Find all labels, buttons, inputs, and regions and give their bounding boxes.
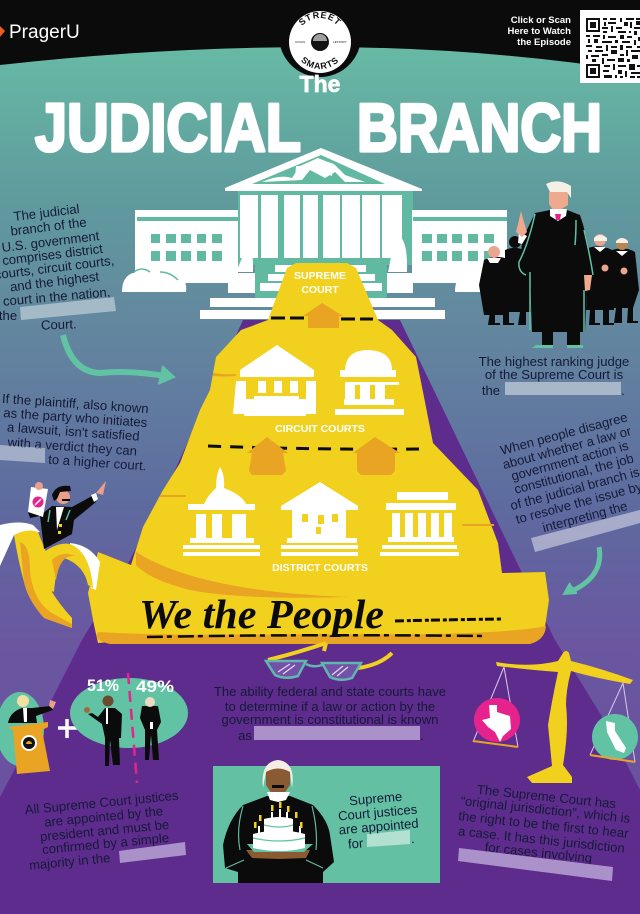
purple base shape [0,320,640,914]
text: life term: for [347,835,365,852]
label: District Courts: DISTRICT COURTS [272,562,368,574]
district courts icons [183,467,459,556]
text: plaintiff: If the plaintiff, also known [2,391,149,416]
text: appointed by president: majority in the [28,850,111,873]
text: judicial review: government is constitutional is known [222,712,438,727]
text: plaintiff: as the party who initiates [3,405,148,430]
title [35,71,602,166]
justices group illustration [479,181,639,348]
QR prompt: Click or Scan [511,15,571,26]
text: appointed by president: confirmed by a simple [41,830,170,857]
pedestals and steps [228,265,413,293]
plus sign [58,719,77,738]
label: Supreme Court [294,270,346,296]
text: highest ranking judge: . [621,383,625,398]
text: life term [337,789,419,852]
text: appointed by president: are appointed by the [43,803,164,830]
text: when people disagree: interpreting the [541,498,629,535]
text: when people disagree: to resolve the issue by [514,478,640,527]
text: judicial branch intro: court in the nation, [2,284,111,309]
text: original jurisdiction: “original jurisdiction”, which is [460,793,631,826]
text: appointed by president: president and must be [39,817,170,844]
text: original jurisdiction: the right to be the first to hear [458,808,630,841]
text: appointed by president: All Supreme Court justices [24,788,180,817]
text: highest ranking judge: of the Supreme Court is [485,367,624,382]
yellow courts hierarchy shape [88,263,549,644]
text: judicial review: . [420,728,424,743]
justice with birthday cake [223,760,334,883]
text: when people disagree [499,409,640,552]
text: judicial branch intro: U.S. government [1,228,100,255]
title: JUDICIAL [35,90,301,166]
text: when people disagree: government action is [510,438,631,484]
columns [240,195,402,258]
text: highest ranking judge [479,354,629,398]
scales of justice [473,651,638,783]
text: appointed by president [24,788,186,873]
pediment [225,148,422,191]
text: original jurisdiction: for cases involving [484,839,593,866]
label: Supreme Court: COURT [301,284,339,296]
text: highest ranking judge: the [482,383,500,398]
text: life term: Supreme [348,789,403,808]
text: plaintiff: to a higher court. [48,452,147,473]
glasses [266,643,392,680]
building teal backing [238,190,413,298]
title: The [300,71,340,97]
text: original jurisdiction: The Supreme Court has [476,782,617,811]
wings [135,210,507,283]
text: life term: Court justices [337,802,418,823]
QR code [580,10,640,83]
banana peel lawyer [0,481,106,628]
text: life term: are appointed [338,816,419,837]
Street Smarts badge: STREET [299,12,342,25]
text: judicial review: to determine if a law or action by the [225,699,435,714]
chief justice [520,210,593,332]
text: judicial branch intro [0,201,116,333]
illustration: 51% 49% vote: 49% [136,677,174,696]
Street Smarts badge [289,11,351,73]
illustration: 51% 49% vote: 51% [87,676,119,695]
text: when people disagree: about whether a law or [501,423,633,472]
peel [0,522,40,566]
bushes [122,268,495,292]
Street Smarts badge: CIVICS [295,40,305,44]
statues [236,235,407,272]
text: highest ranking judge: The highest ranking judge [479,354,629,369]
text: judicial branch intro: The judicial [13,201,80,224]
text: original jurisdiction: a case. It has this jurisdiction [457,823,625,856]
QR prompt: Here to Watch [507,26,571,37]
text: when people disagree: constitutional, the job [512,450,635,497]
label: Supreme Court: SUPREME [294,270,346,282]
text: judicial branch intro: branch of the [10,214,87,239]
text: judicial review: The ability federal and state courts have [214,684,446,699]
We the People script: We the People [139,591,384,637]
illustration: 51% 49% vote [70,673,188,783]
QR prompt [507,15,571,48]
text: judicial branch intro: Court. [41,316,77,333]
header band [0,0,640,77]
arrows up between court levels [247,303,400,475]
dashed divider lines [208,318,424,449]
Supreme Court building [122,148,507,319]
text: life term: . [411,831,415,846]
text: plaintiff: a lawsuit, isn't satisfied [7,419,140,444]
PragerU logo: PragerU [9,22,80,43]
Street Smarts badge: HISTORY [333,40,347,44]
panel: justices appointed for life [213,760,440,883]
text: plaintiff: with a verdict they can [6,434,137,459]
text: when people disagree: When people disagree [499,409,629,458]
lawyer [28,496,96,549]
arrow: intro to courts [63,335,174,384]
text: when people disagree: of the judicial branch is [509,464,640,513]
text: judicial branch intro: and the highest [9,269,100,294]
text: judicial review [214,684,446,743]
text: plaintiff [0,391,149,473]
text: original jurisdiction [457,782,631,881]
illustration: president at podium [0,692,56,774]
circuit courts icons [233,345,404,416]
text: judicial branch intro: comprises district [1,241,104,268]
arrow: to scroll [564,547,600,594]
QR prompt: the Episode [517,37,571,48]
label: Circuit Courts: CIRCUIT COURTS [275,423,365,435]
text: judicial review: as [238,728,252,743]
side justices [479,246,639,325]
Street Smarts badge: SMARTS [302,57,338,70]
